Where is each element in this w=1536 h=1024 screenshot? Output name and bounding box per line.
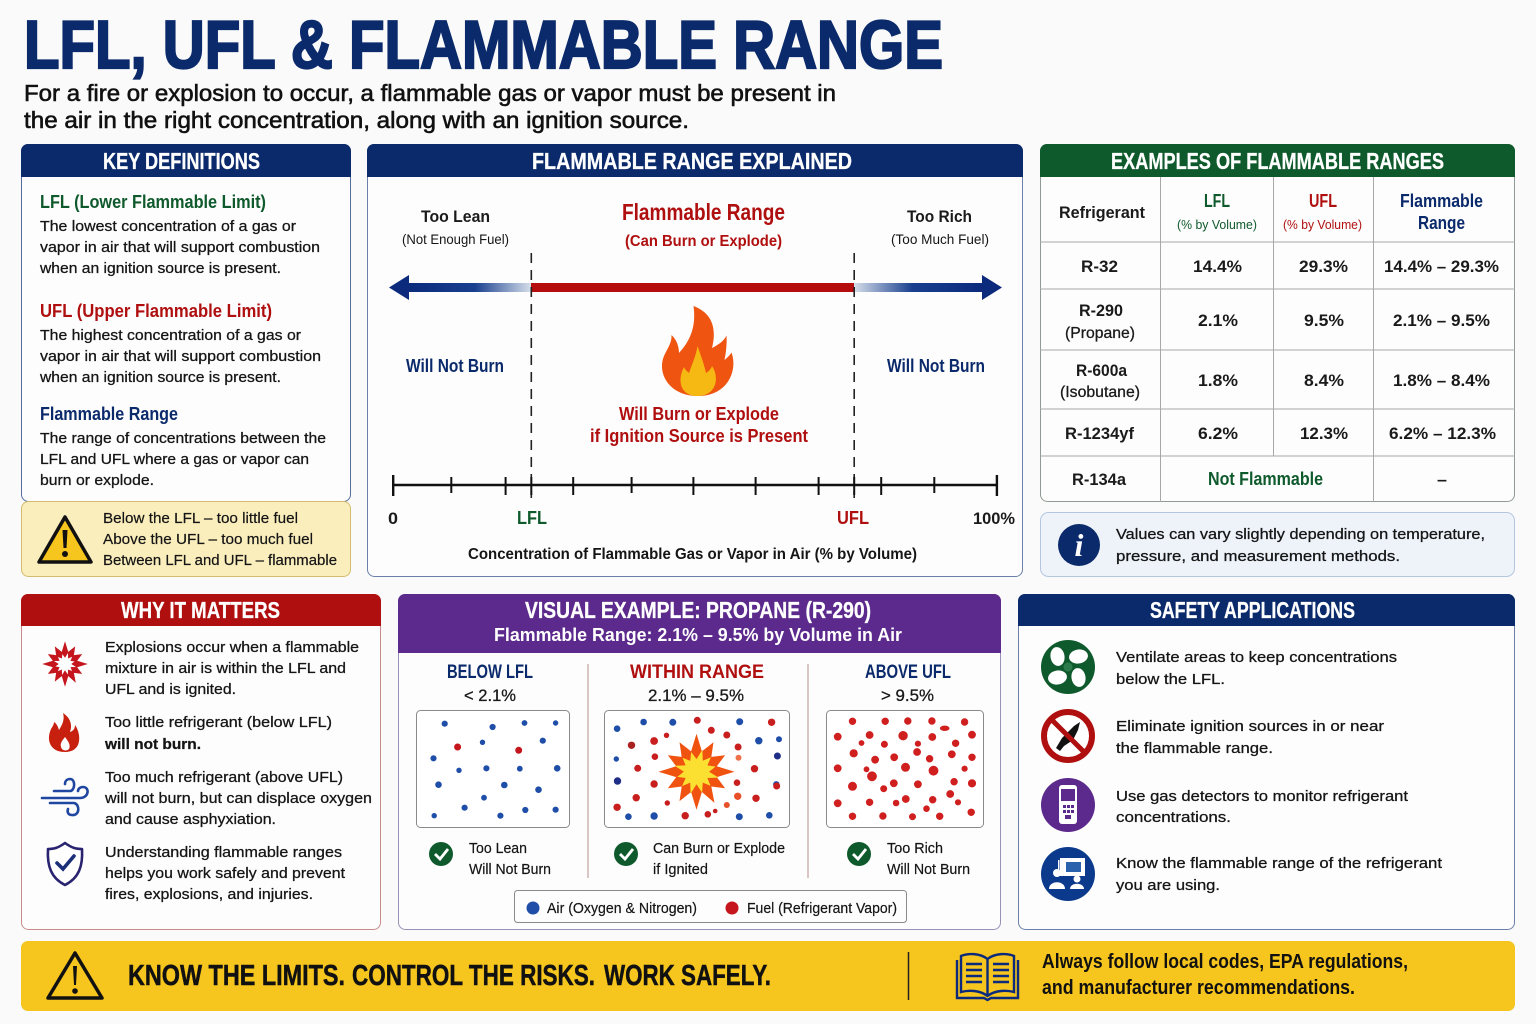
item: ventilate: below the LFL.: [1116, 671, 1225, 688]
status: can burn: Can Burn or Explode: [653, 840, 785, 857]
heading: safety applications: [1018, 594, 1515, 626]
column: within range: WITHIN RANGE: [630, 662, 764, 683]
concentration axis: UFL: [837, 508, 869, 528]
definition: LFL: LFL (Lower Flammable Limit): [40, 192, 266, 212]
heading: visual example: Flammable Range: 2.1% – 9.5% by Volume in Air: [494, 625, 902, 645]
item: know range: Know the flammable range of the refrigerant: [1116, 855, 1443, 872]
item: gas detectors: Use gas detectors to monitor refrigerant: [1116, 788, 1409, 805]
heading: flammable range explained: FLAMMABLE RANGE EXPLAINED: [532, 148, 852, 174]
particle box: above UFL: [826, 710, 984, 828]
item: know range: [1041, 847, 1443, 901]
icon: gas detector: [1041, 778, 1095, 832]
row: R-600a: 8.4%: [1304, 371, 1344, 390]
panel: visual example propane: [398, 594, 1001, 930]
column: above UFL: [826, 662, 984, 878]
arrow: above UFL: [854, 275, 1002, 300]
callout text: Above the UFL – too much fuel: [103, 531, 313, 548]
column: within range: 2.1% – 9.5%: [648, 686, 744, 705]
item: ventilate: [1041, 640, 1397, 694]
column: below LFL: [416, 662, 570, 878]
note text: Values can vary slightly depending on temperature,: [1116, 526, 1485, 543]
table header row: [1059, 191, 1483, 233]
label: too rich: (Too Much Fuel): [891, 231, 989, 247]
definition: flammable range: Flammable Range: [40, 404, 178, 424]
row: R-290: (Propane): [1065, 325, 1135, 342]
row: R-290: 9.5%: [1304, 311, 1344, 330]
item: know range: you are using.: [1116, 877, 1220, 894]
item: too little: Too little refrigerant (below LFL): [105, 714, 332, 731]
particle box: within range: [604, 710, 790, 828]
icon: shield: [48, 843, 82, 885]
range bar: [531, 283, 854, 292]
heading: visual example: VISUAL EXAMPLE: PROPANE (R-290): [525, 597, 871, 623]
label: will not burn right: Will Not Burn: [887, 356, 985, 376]
status: too rich: Too Rich: [887, 840, 943, 857]
subtitle: For a fire or explosion to occur, a flammable gas or vapor must be present in: [24, 80, 836, 106]
item: eliminate ignition: Eliminate ignition sources in or near: [1116, 718, 1384, 735]
row: R-134a: –: [1437, 470, 1447, 489]
table header row: (% by Volume): [1283, 217, 1362, 232]
table header row: UFL: [1309, 191, 1337, 211]
panel: why it matters: [21, 594, 381, 930]
definition: flammable range: [40, 404, 326, 489]
column: below LFL: < 2.1%: [464, 686, 516, 705]
label: flammable range: (Can Burn or Explode): [625, 233, 782, 250]
concentration axis: LFL: [517, 508, 547, 528]
item: explosions: mixture in air is within the LFL and: [105, 660, 346, 677]
banner slogan: [128, 960, 771, 992]
heading: flammable range explained: [367, 144, 1023, 177]
title: LFL, UFL & FLAMMABLE RANGE: [24, 7, 943, 83]
label: flammable range: Flammable Range: [622, 199, 785, 225]
panel: safety applications: [1018, 594, 1515, 930]
icon: flame: [49, 713, 79, 752]
item: too little: will not burn.: [104, 736, 201, 753]
row: R-1234yf: 6.2%: [1198, 424, 1238, 443]
row: R-1234yf: [1065, 424, 1496, 443]
icon: fan: [1041, 640, 1095, 694]
column: below LFL: BELOW LFL: [447, 662, 533, 683]
icon: info: [1058, 524, 1100, 566]
banner note: [1042, 951, 1408, 999]
definition: UFL: UFL (Upper Flammable Limit): [40, 301, 272, 321]
note text: pressure, and measurement methods.: [1116, 548, 1400, 565]
definition: LFL: The lowest concentration of a gas or: [40, 218, 296, 235]
item: eliminate ignition: the flammable range.: [1116, 740, 1273, 757]
row: R-600a: [1060, 361, 1490, 401]
heading: why it matters: WHY IT MATTERS: [121, 597, 280, 623]
status: too rich: Will Not Burn: [887, 861, 970, 878]
concentration axis: 100%: [973, 509, 1015, 528]
definition: flammable range: LFL and UFL where a gas or vapor can: [40, 451, 309, 468]
heading: examples: EXAMPLES OF FLAMMABLE RANGES: [1111, 148, 1444, 174]
row: R-134a: R-134a: [1072, 470, 1127, 489]
banner slogan: WORK SAFELY.: [604, 960, 771, 992]
row: R-1234yf: 6.2% – 12.3%: [1389, 424, 1496, 443]
particle box: below LFL: [416, 710, 570, 828]
label: flammable range: [622, 199, 785, 250]
callout: measurement note: [1040, 512, 1514, 576]
axis title: Concentration of Flammable Gas or Vapor in Air (% by Volume): [468, 546, 917, 563]
heading: visual example: [398, 594, 1001, 653]
row: R-1234yf: 12.3%: [1300, 424, 1348, 443]
subtitle: the air in the right concentration, along with an ignition source.: [24, 107, 689, 133]
icon: no ignition: [1044, 712, 1092, 760]
label: too rich: Too Rich: [907, 207, 972, 226]
callout text: Between LFL and UFL – flammable: [103, 552, 337, 569]
banner: [21, 941, 1515, 1011]
table header row: Flammable: [1400, 191, 1483, 211]
item: explosions: UFL and is ignited.: [105, 681, 236, 698]
item: too little: [49, 713, 332, 753]
table header row: (% by Volume): [1177, 217, 1257, 232]
row: R-32: [1081, 257, 1499, 276]
row: R-32: R-32: [1081, 257, 1118, 276]
label: will burn or explode: Will Burn or Explode: [619, 404, 779, 424]
item: ventilate: Ventilate areas to keep concentrations: [1116, 649, 1397, 666]
item: understanding: Understanding flammable ranges: [105, 844, 342, 861]
panel: flammable range explained: [367, 144, 1023, 576]
column: above UFL: > 9.5%: [881, 686, 934, 705]
definition: flammable range: The range of concentrations between the: [40, 430, 326, 447]
row: R-32: 14.4%: [1193, 257, 1242, 276]
icon: warning triangle: [48, 953, 102, 998]
row: R-600a: (Isobutane): [1060, 384, 1140, 401]
definition: LFL: vapor in air that will support combustion: [40, 239, 320, 256]
banner slogan: CONTROL THE RISKS.: [352, 960, 595, 992]
column: within range: [604, 662, 790, 878]
label: will burn or explode: if Ignition Source is Present: [590, 426, 808, 446]
definition: flammable range: burn or explode.: [40, 472, 154, 489]
item: too much: Too much refrigerant (above UFL): [105, 769, 343, 786]
row: R-134a: Not Flammable: [1208, 469, 1323, 489]
icon: warning triangle: [39, 517, 91, 562]
table header row: Range: [1418, 213, 1465, 233]
item: too much: [42, 769, 372, 828]
banner note: Always follow local codes, EPA regulations,: [1042, 951, 1408, 973]
legend: [514, 890, 906, 922]
icon: training: [1041, 847, 1095, 901]
row: R-134a: [1072, 457, 1447, 501]
row: R-32: 29.3%: [1299, 257, 1348, 276]
icon: explosion: [658, 734, 734, 810]
banner slogan: KNOW THE LIMITS.: [128, 960, 345, 992]
subtitle: [24, 80, 836, 133]
status: can burn: [614, 840, 785, 878]
heading: safety applications: SAFETY APPLICATIONS: [1150, 597, 1355, 623]
definition: LFL: when an ignition source is present.: [39, 260, 281, 277]
row: R-32: 14.4% – 29.3%: [1384, 257, 1499, 276]
item: explosions: [42, 639, 359, 698]
table header row: LFL: [1204, 191, 1230, 211]
arrow: below LFL: [389, 275, 531, 300]
row: R-290: 2.1%: [1198, 311, 1238, 330]
column: above UFL: ABOVE UFL: [865, 662, 951, 683]
definition: UFL: when an ignition source is present.: [39, 369, 281, 386]
label: too lean: [402, 207, 509, 247]
heading: key definitions: [21, 144, 351, 177]
heading: examples: [1040, 144, 1515, 177]
icon: explosion: [42, 641, 88, 687]
row: R-600a: 1.8% – 8.4%: [1393, 371, 1490, 390]
callout text: Below the LFL – too little fuel: [103, 510, 298, 527]
label: too rich: [891, 207, 989, 247]
row: R-600a: 1.8%: [1198, 371, 1238, 390]
note text: [1116, 526, 1485, 565]
item: understanding: fires, explosions, and injuries.: [105, 886, 313, 903]
concentration axis: [388, 475, 1015, 528]
row: R-290: R-290: [1079, 301, 1123, 320]
definition: UFL: The highest concentration of a gas or: [40, 327, 301, 344]
icon: wind: [42, 779, 88, 815]
concentration axis: 0: [388, 509, 398, 528]
item: gas detectors: concentrations.: [1116, 809, 1231, 826]
row: R-1234yf: R-1234yf: [1065, 424, 1134, 443]
item: explosions: Explosions occur when a flammable: [105, 639, 359, 656]
legend: Air (Oxygen & Nitrogen): [547, 900, 697, 917]
callout text: [103, 510, 337, 569]
banner note: and manufacturer recommendations.: [1042, 977, 1355, 999]
icon: info: i: [1075, 527, 1084, 563]
callout: limits warning: [22, 502, 350, 576]
table header row: Refrigerant: [1059, 203, 1145, 222]
status: can burn: if Ignited: [653, 861, 708, 878]
label: will not burn left: Will Not Burn: [406, 356, 504, 376]
heading: key definitions: KEY DEFINITIONS: [103, 148, 260, 174]
label: will burn or explode: [590, 404, 808, 446]
item: eliminate ignition: [1044, 712, 1384, 760]
label: too lean: (Not Enough Fuel): [402, 231, 509, 247]
definition: UFL: [39, 301, 321, 386]
icon: open book: [957, 954, 1018, 1000]
status: too lean: Too Lean: [469, 840, 527, 857]
row: R-290: [1065, 301, 1490, 342]
definition: LFL: [39, 192, 320, 277]
row: R-290: 2.1% – 9.5%: [1393, 311, 1490, 330]
status: too lean: [429, 840, 551, 878]
item: understanding: helps you work safely and prevent: [105, 865, 346, 882]
panel: key definitions: [21, 144, 351, 502]
icon: flame: [662, 306, 733, 396]
item: understanding: [48, 843, 346, 903]
item: too much: and cause asphyxiation.: [105, 811, 276, 828]
status: too lean: Will Not Burn: [469, 861, 551, 878]
label: too lean: Too Lean: [421, 207, 490, 226]
row: R-600a: R-600a: [1076, 361, 1127, 380]
item: too much: will not burn, but can displace oxygen: [104, 790, 372, 807]
panel: examples of flammable ranges: [1040, 144, 1515, 502]
heading: why it matters: [21, 594, 381, 626]
legend: Fuel (Refrigerant Vapor): [747, 900, 897, 917]
status: too rich: [847, 840, 970, 878]
definition: UFL: vapor in air that will support combustion: [40, 348, 321, 365]
item: gas detectors: [1041, 778, 1409, 832]
